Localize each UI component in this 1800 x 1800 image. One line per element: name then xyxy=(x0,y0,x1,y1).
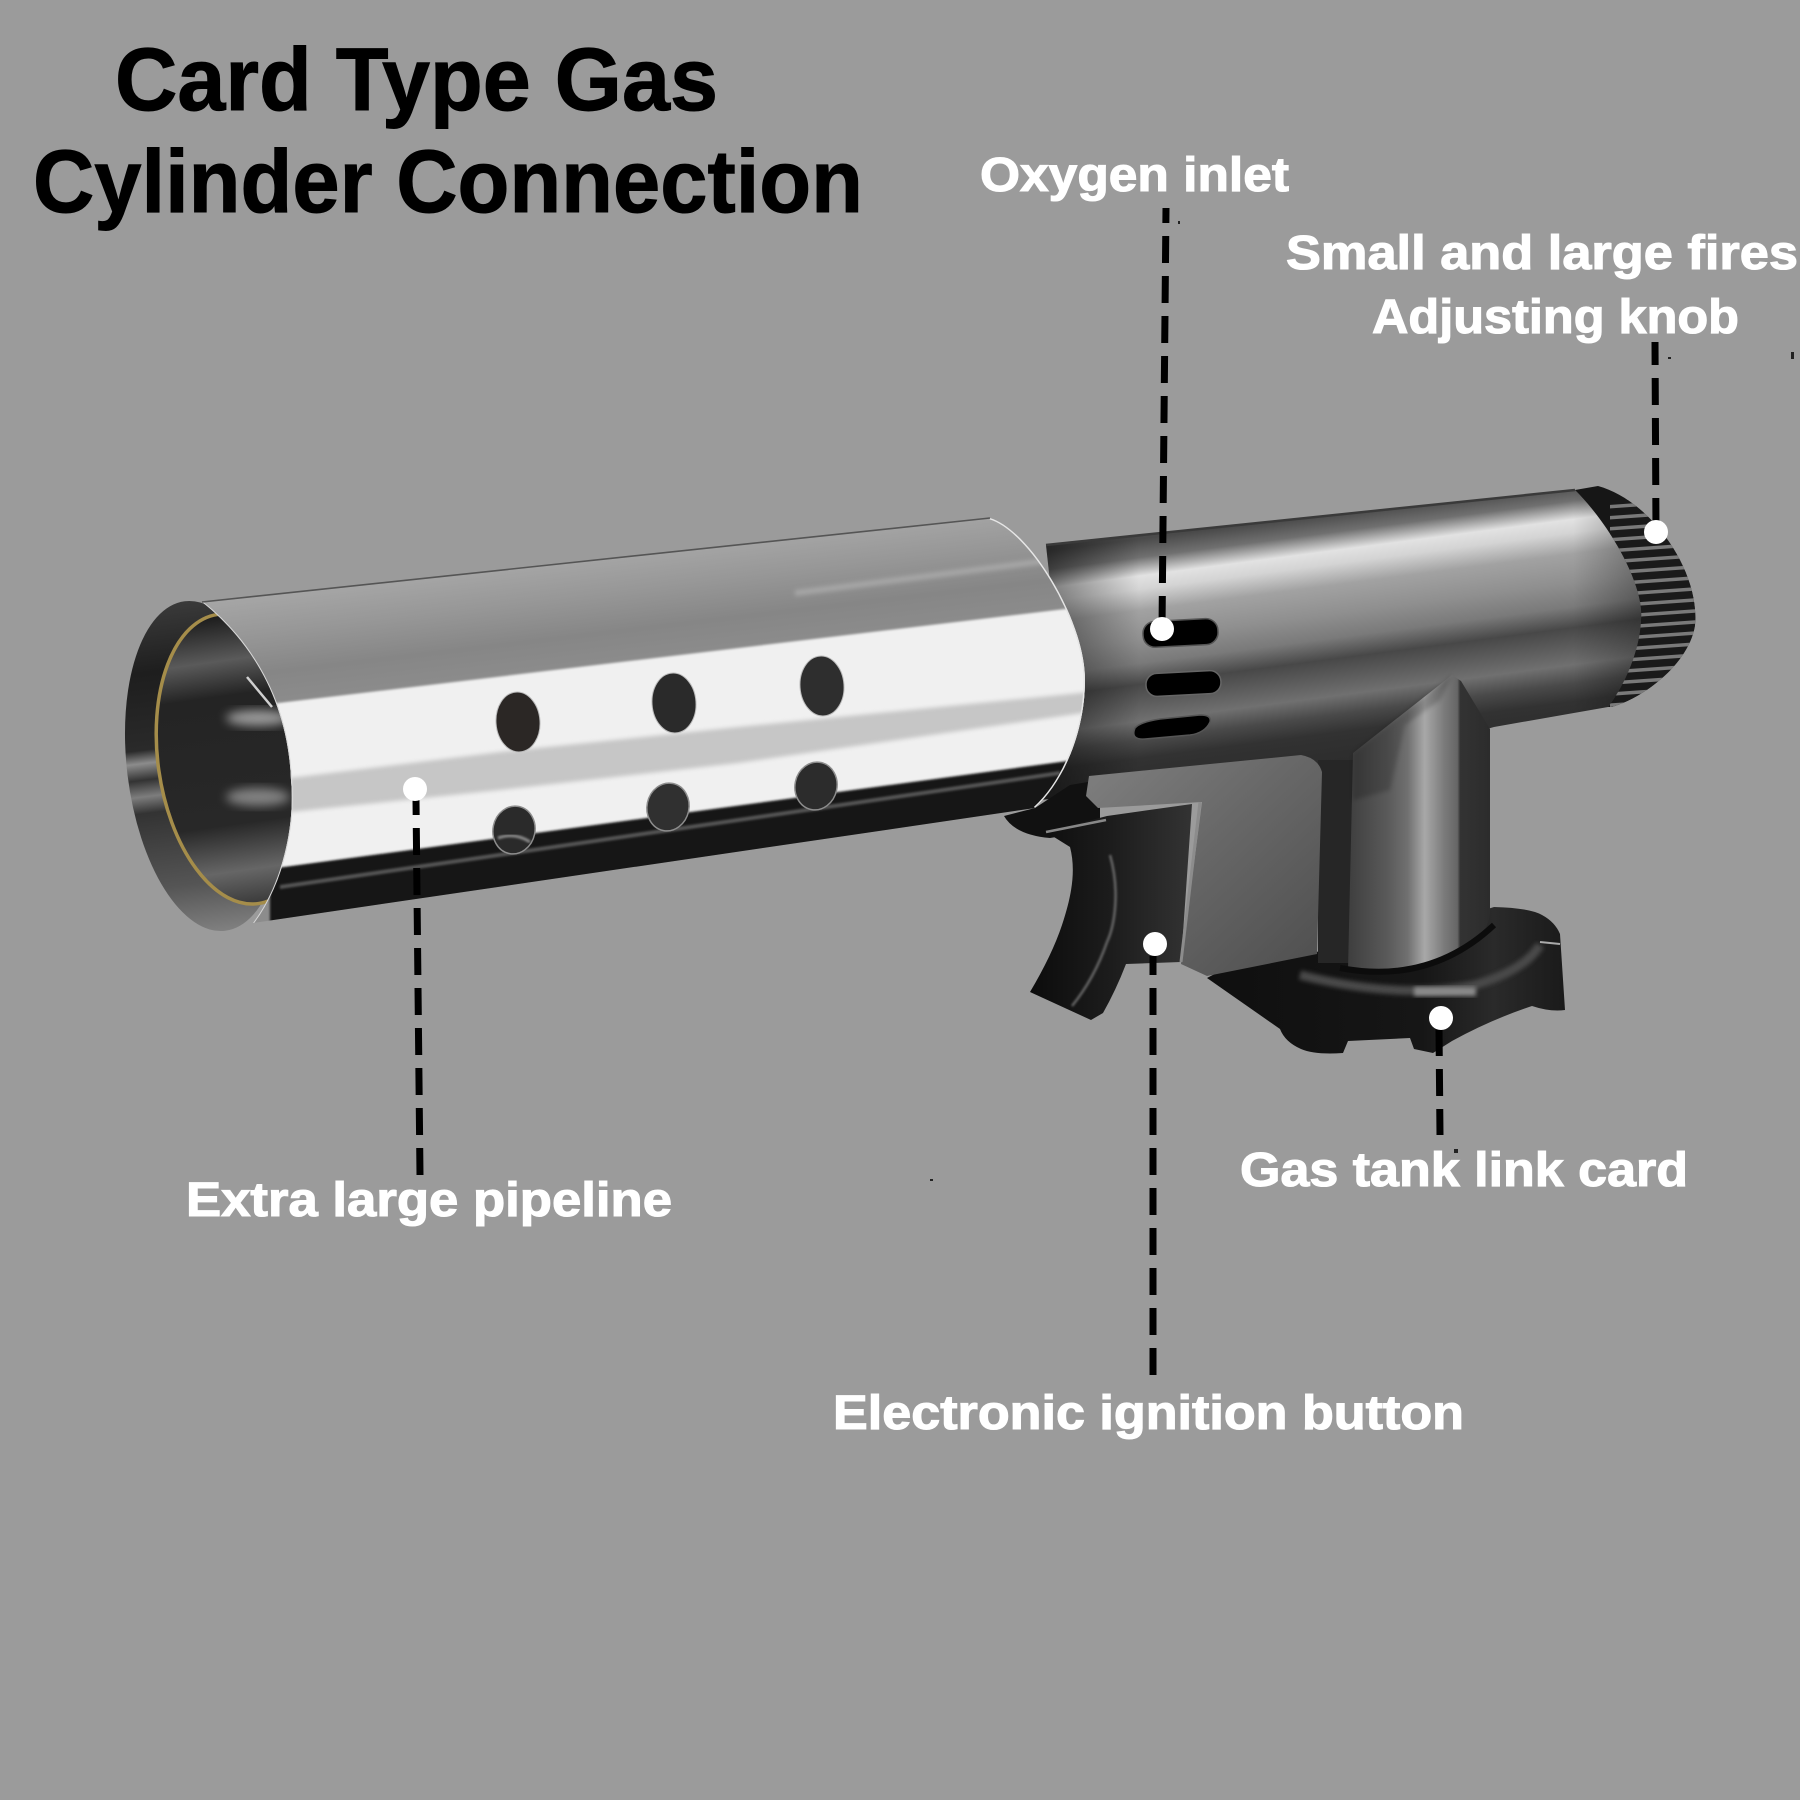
tube holes xyxy=(488,655,846,858)
callout: gas tank link card xyxy=(1240,1006,1688,1197)
air slots xyxy=(1134,618,1222,739)
callout: adjusting knob: Small and large fires xyxy=(1286,227,1798,280)
title: Cylinder Connection xyxy=(33,131,863,231)
dark shadow under tube xyxy=(1004,780,1100,838)
tube top edge xyxy=(202,518,990,602)
adjusting knob xyxy=(1575,486,1696,707)
ignition housing xyxy=(1086,755,1322,976)
torch illustration xyxy=(107,221,1794,1181)
callout: oxygen inlet xyxy=(980,149,1289,641)
gas tank base xyxy=(1207,907,1565,1054)
burner tube opening xyxy=(107,592,338,940)
callout: oxygen inlet: Oxygen inlet xyxy=(980,149,1289,202)
callout: extra large pipeline: Extra large pipeline xyxy=(186,1174,672,1227)
callout: electronic ignition button xyxy=(833,932,1464,1440)
title xyxy=(33,29,863,231)
callout: gas tank link card: Gas tank link card xyxy=(1240,1144,1688,1197)
ignition button xyxy=(1030,802,1200,1020)
callout: electronic ignition button: Electronic ignition button xyxy=(833,1387,1464,1440)
title: Card Type Gas xyxy=(115,29,718,129)
callout: adjusting knob xyxy=(1286,227,1798,544)
burner tube body xyxy=(202,518,1085,923)
vertical neck xyxy=(1340,675,1494,972)
burner cylinder xyxy=(1043,488,1642,800)
callout: adjusting knob: Adjusting knob xyxy=(1372,291,1739,344)
specks xyxy=(930,221,1794,1181)
callout: extra large pipeline xyxy=(186,777,672,1227)
dark column beside neck xyxy=(1318,760,1358,963)
